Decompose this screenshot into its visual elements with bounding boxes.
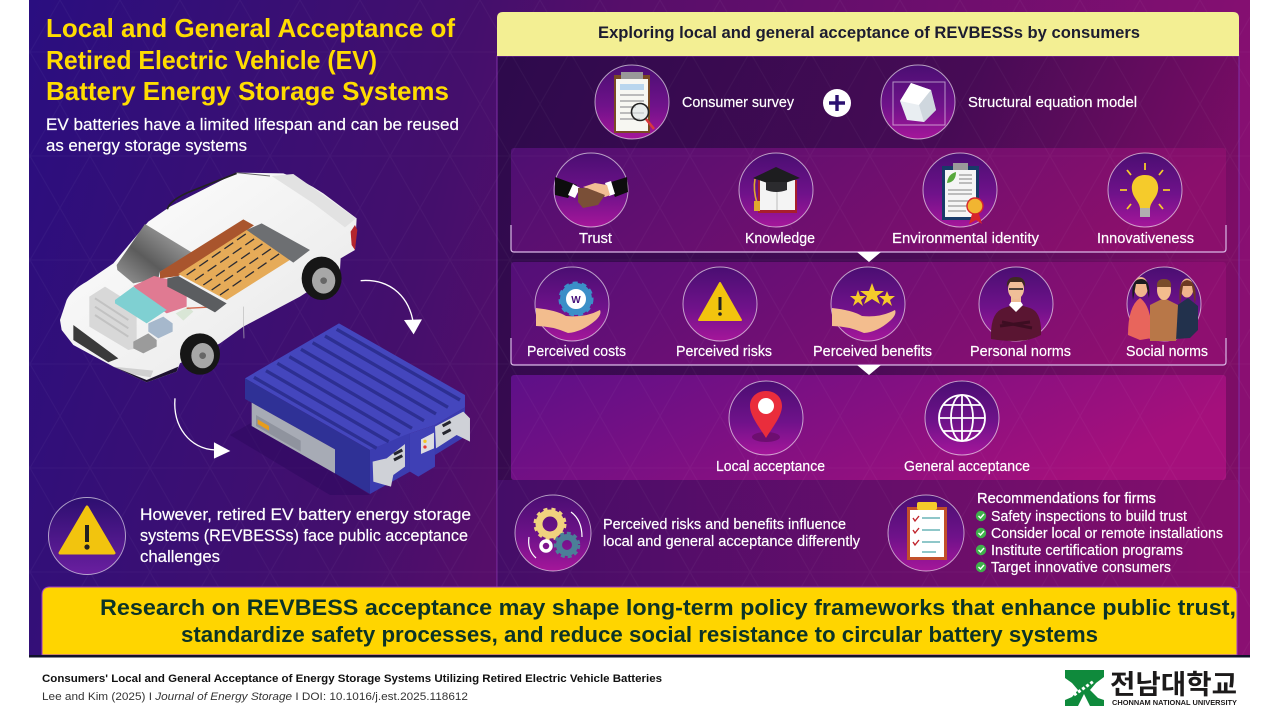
- factor: perceived costs: Perceived costs: [527, 343, 626, 360]
- citation: [42, 673, 662, 703]
- warning callout icon: [48, 498, 126, 574]
- panel: antecedent factors: [511, 148, 1226, 252]
- arrow: car to battery: [361, 280, 422, 334]
- panel: perceptions and norms: [511, 262, 1226, 365]
- university logo: [1065, 663, 1237, 707]
- citation: Consumers' Local and General Acceptance of Energy Storage Systems Utilizing Retired Electric Vehicle Batteries: [42, 673, 662, 685]
- warning callout text: systems (REVBESSs) face public acceptance: [140, 526, 468, 545]
- recommendations list: Recommendations for firms: [977, 490, 1156, 507]
- warning callout text: [140, 505, 471, 566]
- title: Local and General Acceptance of: [46, 13, 455, 43]
- illustration: electric car: [60, 173, 357, 382]
- factor: trust: [554, 153, 628, 247]
- finding: risks and benefits: local and general acceptance differently: [603, 533, 860, 550]
- conclusion banner: [42, 587, 1237, 655]
- outcome: local acceptance: Local acceptance: [716, 458, 825, 475]
- panel: right exploration panel: [497, 56, 1239, 587]
- conclusion banner: standardize safety processes, and reduce social resistance to circular battery systems: [181, 622, 1098, 647]
- title: Retired Electric Vehicle (EV): [46, 45, 377, 75]
- factor: perceived risks: Perceived risks: [676, 343, 772, 360]
- university logo: CHONNAM NATIONAL UNIVERSITY: [1112, 700, 1237, 707]
- method: consumer survey: Consumer survey: [682, 94, 794, 111]
- arrow: perceptions to acceptance: [857, 365, 881, 375]
- outcome: general acceptance: General acceptance: [904, 458, 1030, 475]
- warning callout text: challenges: [140, 547, 220, 566]
- method: consumer survey: [595, 65, 794, 139]
- factor: knowledge: Knowledge: [745, 230, 815, 247]
- recommendation: innovative consumers: Target innovative consumers: [991, 559, 1171, 576]
- engine components: [89, 276, 217, 353]
- method: structural equation model: Structural equation model: [968, 94, 1137, 111]
- factor: personal norms: [970, 267, 1071, 360]
- outcome: local acceptance: [716, 381, 825, 475]
- factor: environmental identity: Environmental identity: [892, 230, 1039, 247]
- intro text: [46, 115, 459, 155]
- factor: social norms: [1126, 267, 1208, 360]
- warning callout text: However, retired EV battery energy storage: [140, 505, 471, 524]
- title: [46, 13, 455, 106]
- factor: trust: Trust: [579, 230, 613, 247]
- recommendations icon: [888, 495, 964, 571]
- plus icon: [823, 89, 851, 117]
- footer rule: [29, 655, 1250, 658]
- arrow: factors to perceptions: [857, 252, 881, 262]
- factor: personal norms: Personal norms: [970, 343, 1071, 360]
- factor: environmental identity: [892, 153, 1039, 247]
- factor: innovativeness: [1097, 153, 1194, 247]
- panel: acceptance outcomes: [511, 375, 1226, 480]
- outcome: general acceptance: [904, 381, 1030, 475]
- factor: social norms: Social norms: [1126, 343, 1208, 360]
- factor: perceived costs: W: [571, 295, 581, 306]
- intro text: as energy storage systems: [46, 136, 247, 155]
- factor: perceived benefits: [813, 267, 932, 360]
- panel heading: Exploring local and general acceptance of REVBESSs by consumers: [598, 23, 1140, 42]
- wheels: [180, 257, 342, 375]
- recommendation: installations: Consider local or remote installations: [991, 525, 1223, 542]
- title: Battery Energy Storage Systems: [46, 76, 449, 106]
- factor: perceived benefits: Perceived benefits: [813, 343, 932, 360]
- finding: risks and benefits: [515, 495, 860, 571]
- factor: knowledge: [739, 153, 815, 247]
- conclusion banner: Research on REVBESS acceptance may shape long-term policy frameworks that enhance public trust,: [100, 595, 1236, 620]
- arrow: reuse as storage: [175, 398, 230, 459]
- recommendation: safety inspections: Safety inspections to build trust: [991, 508, 1188, 525]
- finding: risks and benefits: Perceived risks and benefits influence: [603, 516, 846, 533]
- factor: innovativeness: Innovativeness: [1097, 230, 1194, 247]
- illustration: battery energy storage system: [230, 323, 470, 495]
- factor: perceived costs: [527, 267, 626, 360]
- method: structural equation model: [881, 65, 1137, 139]
- recommendations list: [976, 490, 1223, 576]
- university logo: 전남대학교: [1110, 663, 1237, 702]
- citation: Lee and Kim (2025) I Journal of Energy Storage I DOI: 10.1016/j.est.2025.118612: [42, 691, 468, 703]
- intro text: EV batteries have a limited lifespan and can be reused: [46, 115, 459, 134]
- battery tray: [160, 219, 310, 312]
- recommendation: certification: Institute certification programs: [991, 542, 1183, 559]
- panel heading: [497, 12, 1239, 56]
- factor: perceived risks: [676, 267, 772, 360]
